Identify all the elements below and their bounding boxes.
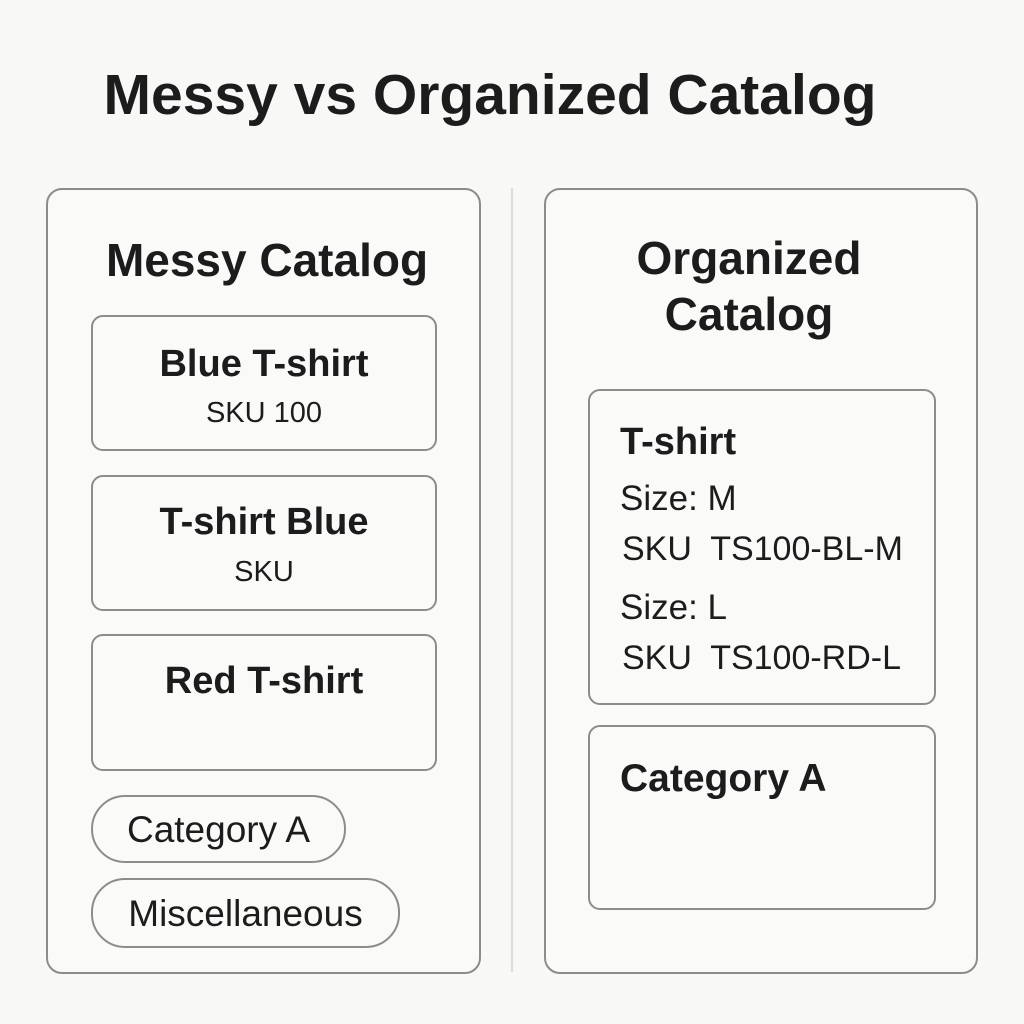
heading: messy catalog: Messy Catalog <box>106 234 428 286</box>
heading: organized catalog: Catalog <box>665 288 833 340</box>
product group: t-shirt: Size: L <box>620 588 727 627</box>
pill: category a <box>91 795 346 863</box>
category a box <box>588 725 936 910</box>
panel: messy catalog <box>46 188 481 974</box>
item: red t-shirt <box>91 634 437 771</box>
pill: miscellaneous: Miscellaneous <box>128 893 363 934</box>
item: blue t-shirt <box>91 315 437 451</box>
heading: organized catalog: Organized <box>637 232 861 284</box>
pill: miscellaneous <box>91 878 400 948</box>
product group: t-shirt <box>588 389 936 705</box>
divider <box>511 188 513 972</box>
product group: t-shirt: SKU TS100-RD-L <box>622 639 901 677</box>
heading: organized catalog <box>637 232 861 340</box>
category a box: Category A <box>620 757 827 800</box>
item: t-shirt blue <box>91 475 437 611</box>
item: t-shirt blue: T-shirt Blue <box>159 501 369 543</box>
item: blue t-shirt: SKU 100 <box>206 397 322 429</box>
item: red t-shirt: Red T-shirt <box>165 660 363 702</box>
panel: organized catalog <box>544 188 978 974</box>
item: t-shirt blue: SKU <box>234 556 294 588</box>
item: blue t-shirt: Blue T-shirt <box>159 343 369 385</box>
pill: category a: Category A <box>127 809 310 850</box>
title: Messy vs Organized Catalog <box>104 63 876 127</box>
product group: t-shirt: T-shirt <box>620 421 736 463</box>
product group: t-shirt: Size: M <box>620 479 737 518</box>
product group: t-shirt: SKU TS100-BL-M <box>622 530 903 568</box>
